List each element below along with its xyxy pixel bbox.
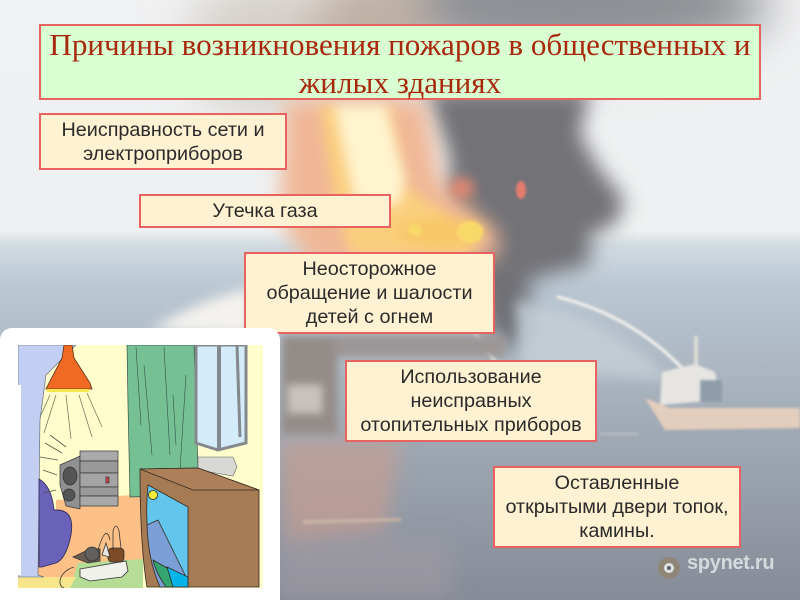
cause box 2 — [139, 194, 391, 228]
lamp — [46, 345, 92, 389]
window — [196, 345, 246, 450]
title: жилых зданиях — [299, 65, 501, 100]
armchair — [39, 479, 72, 567]
cause box 5 — [493, 466, 741, 548]
dark smoke column — [425, 90, 625, 350]
cause box 1: Неисправность сети и — [61, 118, 265, 140]
fireball — [280, 100, 500, 265]
cause box 3 — [244, 252, 495, 334]
watermark text: spynet.ru — [687, 552, 774, 574]
cause box 5: Оставленные — [555, 472, 679, 494]
icon: spynet logo — [658, 557, 680, 579]
watermark: spynet.ru logo — [658, 557, 680, 579]
cause box 4: неисправных — [410, 390, 532, 412]
panel: room illustration — [0, 328, 280, 600]
wall column — [18, 345, 76, 577]
cause box 4: отопительных приборов — [360, 414, 582, 436]
water spray arcs — [475, 297, 682, 368]
cause box 2: Утечка газа — [212, 200, 318, 222]
cause box 3: Неосторожное — [302, 258, 436, 280]
cause box 5: открытыми двери топок, — [505, 496, 728, 518]
radiator — [198, 457, 237, 476]
illustration: room with overloaded socket — [18, 345, 263, 588]
title — [39, 24, 761, 100]
vessel — [600, 336, 800, 435]
cause box 1 — [39, 113, 287, 170]
cause box 4 — [345, 360, 597, 442]
curtain — [127, 345, 198, 497]
floor — [18, 495, 143, 588]
cause box 1: электроприборов — [83, 142, 243, 164]
platform and orange reflection — [280, 440, 450, 600]
cause box 3: обращение и шалости — [266, 282, 473, 304]
stereo system — [60, 451, 118, 509]
cause box 5: камины. — [579, 520, 655, 542]
title: Причины возникновения пожаров в общественных и — [49, 27, 751, 62]
cause box 4: Использование — [400, 366, 542, 388]
soft top smoke — [190, 0, 770, 115]
television — [140, 468, 259, 587]
power strip with plugs — [60, 526, 128, 588]
cause box 3: детей с огнем — [306, 306, 433, 328]
